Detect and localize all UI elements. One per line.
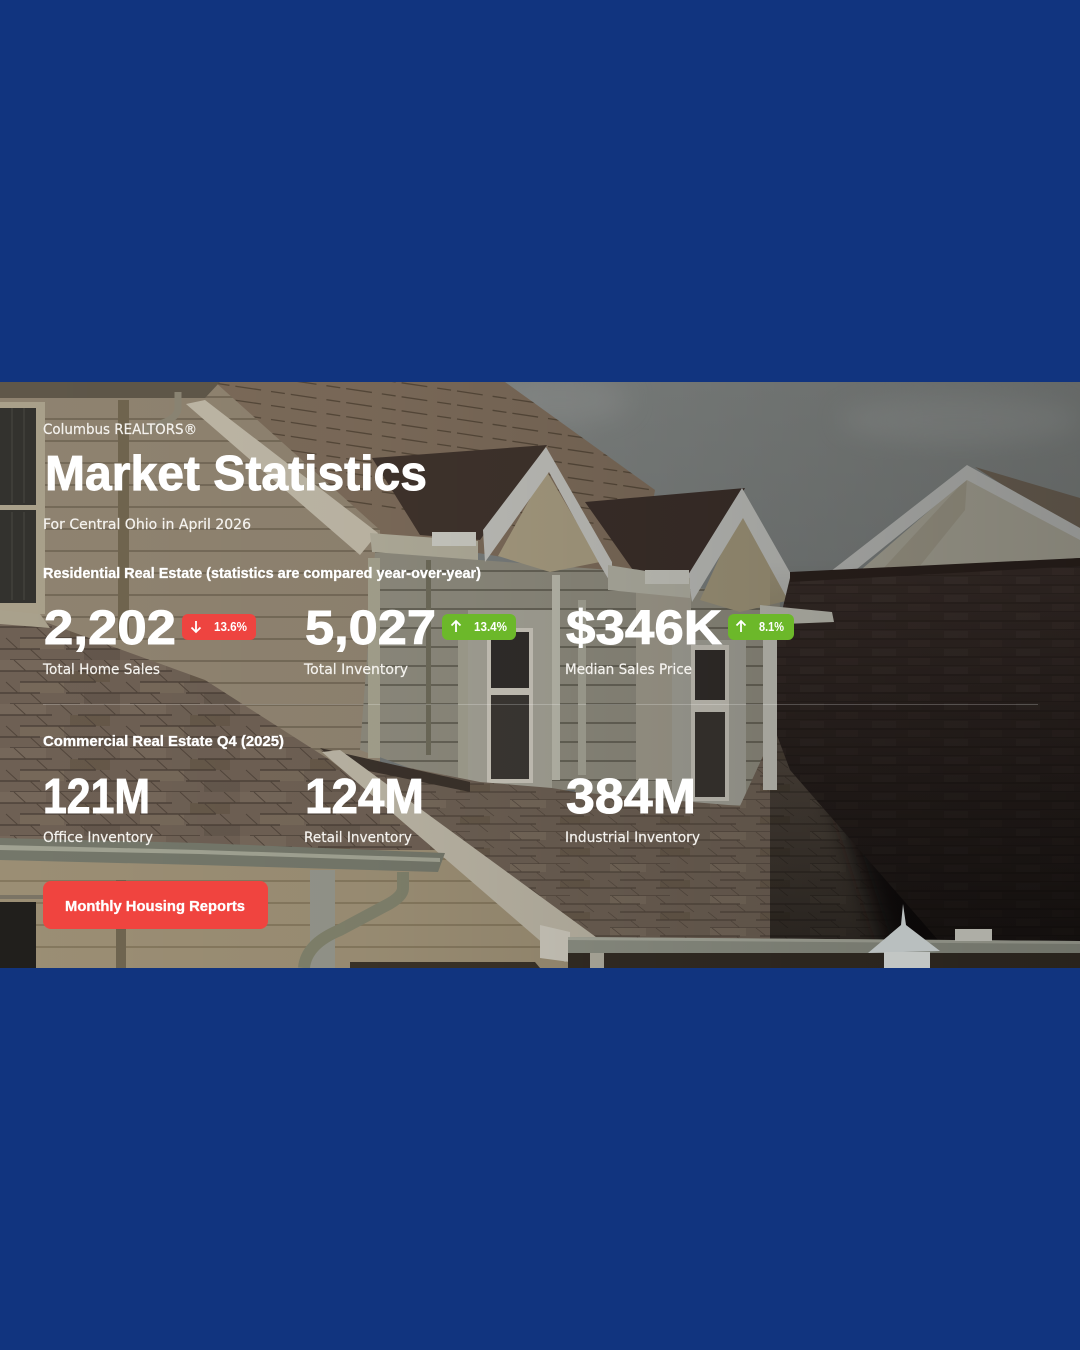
badge: down 13.6%: 13.6% — [214, 619, 247, 634]
stat: retail inventory: 124M — [305, 770, 424, 824]
stat: median sales price: $346K — [566, 602, 722, 655]
heading: residential real estate: Residential Real Estate (statistics are compared year-over-year) — [43, 566, 481, 582]
stat: total home sales — [42, 602, 256, 678]
badge: up 8.1% — [728, 614, 794, 640]
infographic canvas — [0, 382, 1080, 968]
stat: office inventory: 121M — [43, 770, 150, 824]
stat: total home sales: 2,202 — [44, 602, 176, 655]
subtitle: For Central Ohio in April 2026 — [43, 517, 251, 533]
stat: total home sales: Total Home Sales — [42, 662, 160, 678]
stat: retail inventory: Retail Inventory — [304, 830, 412, 846]
stat: office inventory — [43, 770, 153, 846]
stat: industrial inventory: 384M — [566, 770, 696, 824]
badge: up 13.4%: 13.4% — [474, 619, 507, 634]
stat: industrial inventory: Industrial Inventory — [565, 830, 700, 846]
divider — [43, 704, 1038, 705]
stat: total inventory: Total Inventory — [303, 662, 408, 678]
badge: down 13.6% — [182, 614, 256, 640]
button: monthly housing reports — [43, 881, 268, 929]
title: Market Statistics — [45, 447, 427, 501]
stat: total inventory: 5,027 — [305, 602, 436, 655]
eyebrow: Columbus REALTORS: Columbus REALTORS® — [43, 422, 197, 438]
stat: industrial inventory — [565, 770, 700, 846]
stat: office inventory: Office Inventory — [43, 830, 153, 846]
stat: retail inventory — [304, 770, 424, 846]
button: monthly housing reports: Monthly Housing Reports — [65, 898, 245, 915]
stat: median sales price — [565, 602, 794, 678]
badge: up 13.4% — [442, 614, 516, 640]
stat: total inventory — [303, 602, 516, 678]
badge: up 8.1%: 8.1% — [759, 619, 784, 634]
photo of house rooftops — [0, 350, 1080, 968]
stat: median sales price: Median Sales Price — [565, 662, 692, 678]
heading: commercial real estate: Commercial Real Estate Q4 (2025) — [43, 734, 284, 750]
